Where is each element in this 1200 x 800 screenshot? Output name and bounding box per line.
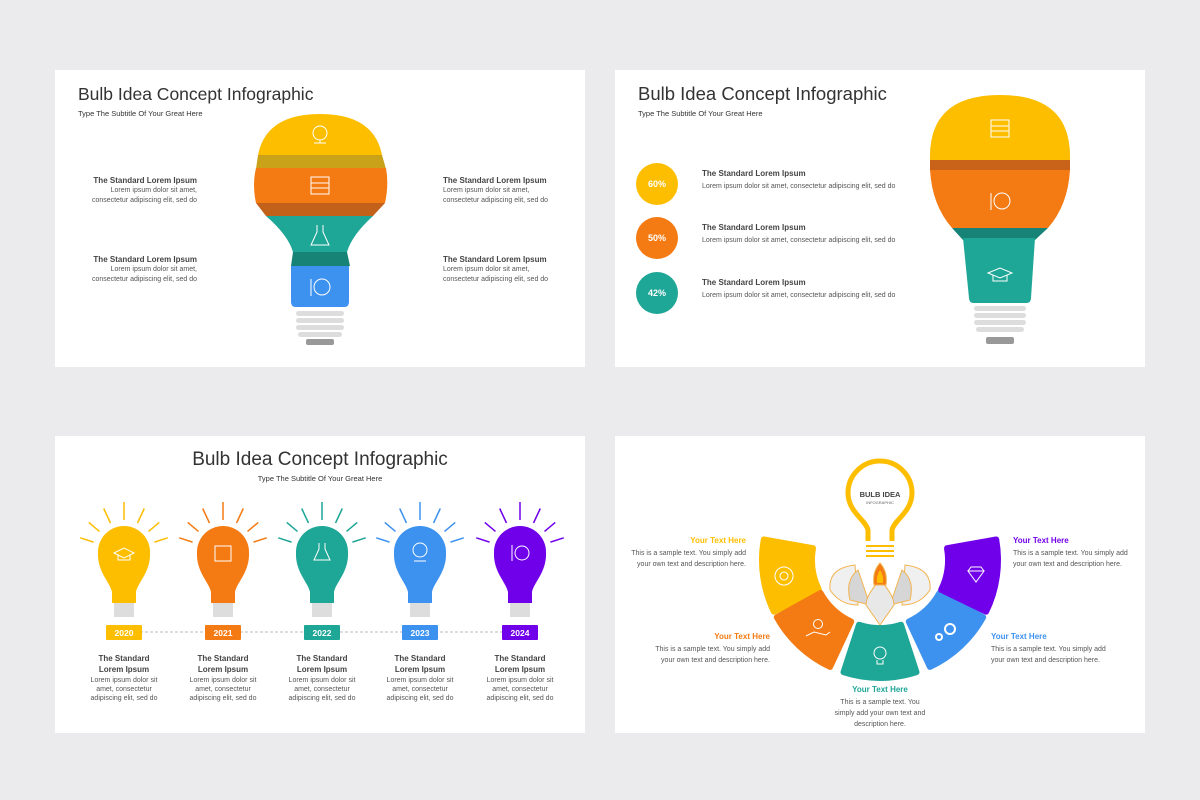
panel: bottom-left slide: [55, 436, 585, 733]
timeline item 2021: adipiscing elit, sed do: [190, 695, 257, 702]
percent item 50: The Standard Lorem Ipsum: [702, 223, 806, 232]
rocket: [830, 563, 930, 625]
text block: left bottom: Lorem ipsum dolor sit amet,: [111, 266, 197, 273]
text: teal item: simply add your own text and: [835, 710, 925, 717]
timeline item 2024: adipiscing elit, sed do: [487, 695, 554, 702]
text: teal item: [835, 685, 925, 728]
percent item 50: 50%: [648, 233, 666, 243]
segmented bulb: [930, 95, 1070, 344]
text block: right bottom: Lorem ipsum dolor sit amet,: [443, 266, 529, 273]
timeline item 2022: [278, 502, 366, 702]
text block: right top: The Standard Lorem Ipsum: [443, 176, 547, 185]
title: Bulb Idea Concept Infographic: [192, 449, 448, 470]
text block: left top: consectetur adipiscing elit, sed do: [92, 197, 197, 204]
segment: blue: [909, 593, 983, 667]
text: teal item: description here.: [854, 721, 906, 728]
timeline item 2023: The Standard: [394, 654, 446, 663]
timeline item 2022: Lorem Ipsum: [297, 665, 347, 674]
text block: left top: Lorem ipsum dolor sit amet,: [111, 187, 197, 194]
subtitle: Type The Subtitle Of Your Great Here: [258, 474, 382, 483]
percent item 60: [636, 163, 895, 205]
timeline dashed line: [140, 631, 505, 633]
timeline item 2020: 2020: [115, 628, 134, 638]
timeline item 2023: amet, consectetur: [392, 686, 448, 693]
text block: left bottom: consectetur adipiscing elit, sed do: [92, 276, 197, 283]
timeline item 2024: amet, consectetur: [492, 686, 548, 693]
timeline item 2024: [476, 502, 564, 702]
text: blue item: This is a sample text. You simply add: [991, 646, 1106, 653]
panel: top-left slide: [55, 70, 585, 367]
percent item 60: 60%: [648, 179, 666, 189]
text block: left bottom: The Standard Lorem Ipsum: [93, 255, 197, 264]
segment: teal: [844, 625, 916, 678]
timeline item 2021: Lorem Ipsum: [198, 665, 248, 674]
timeline item 2022: amet, consectetur: [294, 686, 350, 693]
text: orange item: Your Text Here: [714, 632, 771, 641]
text: yellow item: Your Text Here: [690, 536, 747, 545]
subtitle: Type The Subtitle Of Your Great Here: [78, 109, 203, 118]
timeline item 2024: Lorem ipsum dolor sit: [487, 677, 554, 684]
percent item 42: 42%: [648, 288, 666, 298]
timeline item 2023: [376, 502, 464, 702]
segment: purple: [941, 540, 998, 612]
subtitle: Type The Subtitle Of Your Great Here: [638, 109, 763, 118]
timeline item 2023: Lorem Ipsum: [395, 665, 445, 674]
percent item 60: The Standard Lorem Ipsum: [702, 169, 806, 178]
timeline item 2022: adipiscing elit, sed do: [289, 695, 356, 702]
timeline item 2021: Lorem ipsum dolor sit: [190, 677, 257, 684]
percent item 50: Lorem ipsum dolor sit amet, consectetur adipiscing elit, sed do: [702, 237, 895, 244]
text block: right top: Lorem ipsum dolor sit amet,: [443, 187, 529, 194]
percent item 42: [636, 272, 895, 314]
timeline item 2024: The Standard: [494, 654, 546, 663]
timeline item 2020: amet, consectetur: [96, 686, 152, 693]
outline bulb: BULB IDEA: [860, 490, 901, 499]
timeline item 2021: [179, 502, 267, 702]
text block: right bottom: The Standard Lorem Ipsum: [443, 255, 547, 264]
timeline item 2024: Lorem Ipsum: [495, 665, 545, 674]
text: blue item: Your Text Here: [991, 632, 1047, 641]
outline bulb: INFOGRAPHIC: [866, 500, 894, 505]
text block: right top: [443, 176, 548, 204]
text block: left top: The Standard Lorem Ipsum: [93, 176, 197, 185]
text block: left top: [92, 176, 197, 204]
text block: right bottom: consectetur adipiscing elit, sed do: [443, 276, 548, 283]
text: blue item: your own text and description here.: [991, 657, 1100, 664]
title: Bulb Idea Concept Infographic: [638, 83, 887, 104]
percent item 60: Lorem ipsum dolor sit amet, consectetur adipiscing elit, sed do: [702, 183, 895, 190]
timeline item 2024: 2024: [511, 628, 530, 638]
text block: right top: consectetur adipiscing elit, sed do: [443, 197, 548, 204]
panel: bottom-right slide: [615, 436, 1145, 733]
timeline item 2021: The Standard: [197, 654, 249, 663]
timeline item 2022: The Standard: [296, 654, 348, 663]
segmented bulb: [254, 114, 387, 345]
timeline item 2021: 2021: [214, 628, 233, 638]
percent item 50: [636, 217, 895, 259]
text: yellow item: [631, 536, 747, 568]
text: purple item: This is a sample text. You simply add: [1013, 550, 1128, 557]
text: purple item: [1013, 536, 1128, 568]
percent item 42: Lorem ipsum dolor sit amet, consectetur adipiscing elit, sed do: [702, 292, 895, 299]
text: yellow item: This is a sample text. You simply add: [631, 550, 746, 557]
timeline item 2020: [80, 502, 168, 702]
text: blue item: [991, 632, 1106, 664]
timeline item 2023: Lorem ipsum dolor sit: [387, 677, 454, 684]
text block: left bottom: [92, 255, 197, 283]
timeline item 2022: 2022: [313, 628, 332, 638]
text: teal item: Your Text Here: [852, 685, 908, 694]
segment: orange: [777, 593, 851, 667]
timeline item 2020: Lorem Ipsum: [99, 665, 149, 674]
timeline item 2020: adipiscing elit, sed do: [91, 695, 158, 702]
text: orange item: your own text and description here.: [661, 657, 770, 664]
timeline item 2020: Lorem ipsum dolor sit: [91, 677, 158, 684]
title: Bulb Idea Concept Infographic: [78, 84, 314, 104]
timeline item 2023: adipiscing elit, sed do: [387, 695, 454, 702]
segment: yellow: [762, 540, 819, 612]
timeline item 2023: 2023: [411, 628, 430, 638]
timeline item 2022: Lorem ipsum dolor sit: [289, 677, 356, 684]
text: teal item: This is a sample text. You: [840, 699, 920, 706]
text: purple item: Your Text Here: [1013, 536, 1069, 545]
text: orange item: This is a sample text. You simply add: [655, 646, 770, 653]
text: purple item: your own text and description here.: [1013, 561, 1122, 568]
percent item 42: The Standard Lorem Ipsum: [702, 278, 806, 287]
timeline item 2021: amet, consectetur: [195, 686, 251, 693]
timeline item 2020: The Standard: [98, 654, 150, 663]
panel: top-right slide: [615, 70, 1145, 367]
outline bulb: [848, 461, 912, 556]
text: orange item: [655, 632, 771, 664]
text: yellow item: your own text and description here.: [637, 561, 746, 568]
text block: right bottom: [443, 255, 548, 283]
